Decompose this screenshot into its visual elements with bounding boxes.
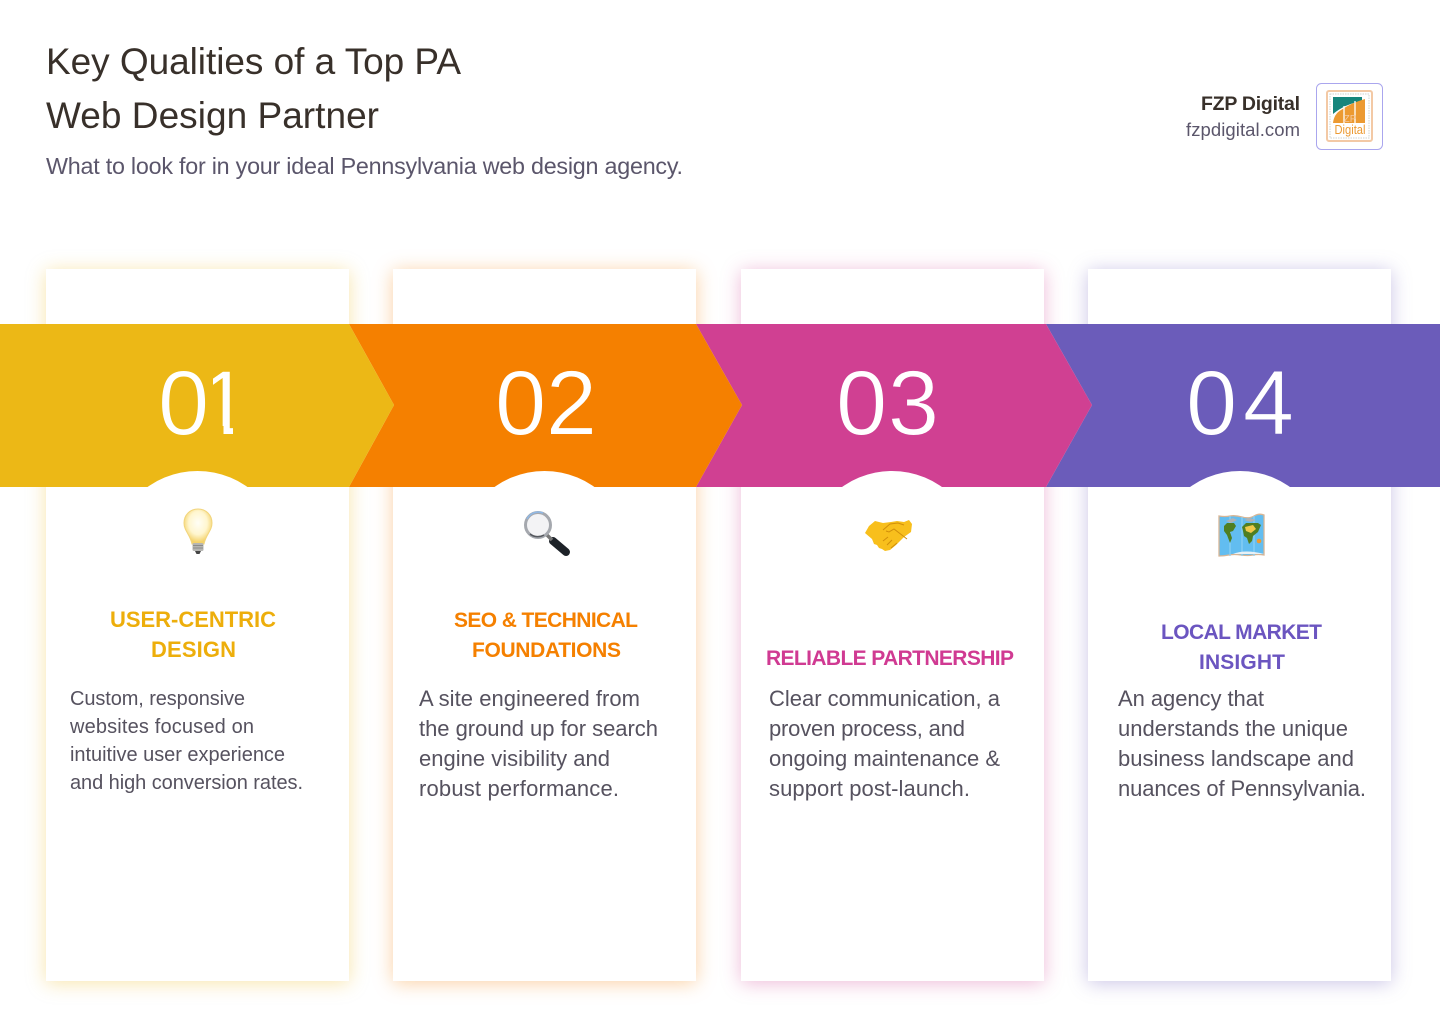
panel: card 4 background (1088, 269, 1391, 981)
brand name and url (1186, 93, 1300, 140)
card 3 description: Clear communication, a (769, 686, 1001, 711)
card 1 heading: USER-CENTRIC (110, 607, 276, 632)
card 1 description (69, 688, 303, 794)
card 2 text (419, 609, 658, 801)
card 1 text (69, 607, 303, 794)
logo: Digital (1334, 123, 1366, 137)
icon: folded world map (1219, 514, 1264, 556)
logo: ZP (1344, 114, 1357, 125)
card 1 heading (110, 607, 276, 662)
arrow 4: 04 (1186, 352, 1294, 454)
arrow 1: 1 (199, 352, 250, 454)
card 2 description: A site engineered from (419, 686, 640, 711)
card 4 description (1118, 686, 1366, 801)
panel: card 3 background (741, 269, 1044, 981)
card 3 description (769, 686, 1001, 801)
icon: magnifying glass (526, 512, 566, 552)
title: Web Design Partner (46, 95, 379, 136)
arrow 2: 02 (495, 352, 597, 454)
card 2 description (419, 686, 658, 801)
white arc tabs (148, 471, 1290, 487)
card 1 description: intuitive user experience (70, 744, 285, 766)
subtitle: What to look for in your ideal Pennsylvania web design agency. (46, 153, 683, 179)
card 4 heading: LOCAL MARKET (1161, 621, 1322, 644)
card 2 description: the ground up for search (419, 716, 658, 741)
card 4 description: business landscape and (1118, 746, 1354, 771)
card 4 description: understands the unique (1118, 716, 1348, 741)
card 4 description: nuances of Pennsylvania. (1118, 776, 1366, 801)
card 1 description: websites focused on (69, 716, 254, 738)
card 3 description: ongoing maintenance & (769, 746, 1000, 771)
card 1 heading: DESIGN (151, 637, 236, 662)
panel: card 1 background (46, 269, 349, 981)
brand name and url: FZP Digital (1201, 93, 1300, 115)
card 4 text (1118, 621, 1366, 801)
panel: card 2 background (393, 269, 696, 981)
card 2 heading: SEO & TECHNICAL (454, 609, 638, 632)
arrow 3 (696, 324, 1092, 487)
arrow 3: 03 (836, 352, 939, 454)
icon: light bulb (184, 509, 212, 554)
card 4 heading: INSIGHT (1199, 651, 1285, 674)
title (46, 41, 461, 136)
card 4 heading (1161, 621, 1322, 674)
card 1 description: and high conversion rates. (70, 772, 303, 794)
card 2 description: engine visibility and (419, 746, 610, 771)
card 2 heading: FOUNDATIONS (472, 639, 621, 662)
card 2 heading (454, 609, 638, 662)
card 1 description: Custom, responsive (70, 688, 245, 710)
brand name and url: fzpdigital.com (1186, 119, 1300, 140)
arrow 1 (0, 324, 394, 487)
arrow 1: 0 (158, 352, 209, 454)
card 2 description: robust performance. (419, 776, 619, 801)
card 3 heading: RELIABLE PARTNERSHIP (766, 647, 1014, 670)
arrow 4 (1046, 324, 1440, 487)
card 4 description: An agency that (1118, 686, 1264, 711)
logo (1316, 84, 1382, 150)
title: Key Qualities of a Top PA (46, 41, 461, 82)
card 3 description: proven process, and (769, 716, 965, 741)
icon: handshake (865, 520, 912, 551)
card 3 text (766, 647, 1014, 801)
arrow 2 (349, 324, 742, 487)
card 3 description: support post-launch. (769, 776, 970, 801)
